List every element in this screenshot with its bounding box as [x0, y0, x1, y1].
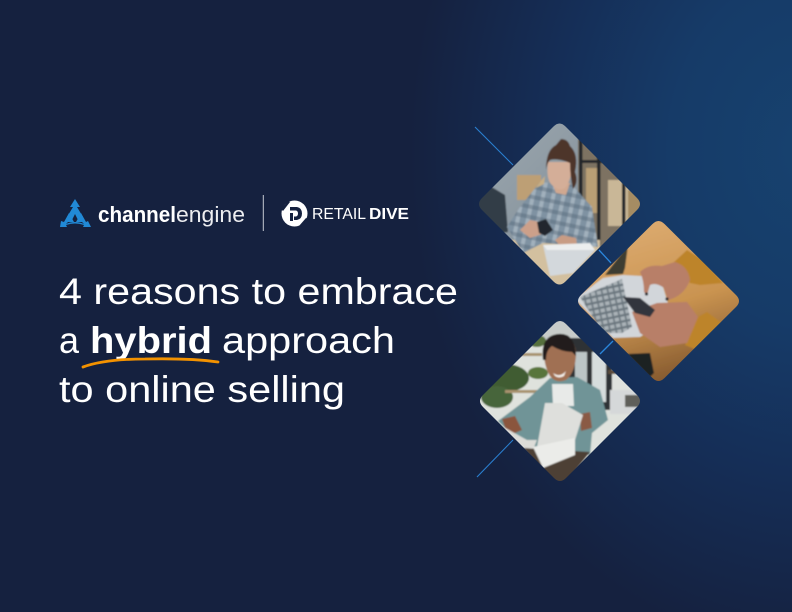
accent line: between middle and bottom photos — [600, 341, 613, 354]
wordmark: engine light: engine — [176, 202, 245, 227]
wordmark: RETAIL: RETAIL — [312, 206, 366, 223]
title line 2: approach: approach — [222, 320, 395, 361]
logo: ChannelEngine — [60, 199, 245, 227]
title line 2: a: a — [59, 320, 79, 361]
photo: woman scanning a parcel — [479, 124, 640, 284]
logo: Retail Dive — [281, 200, 409, 227]
photo: man unboxing a package — [480, 321, 640, 481]
wordmark: DIVE: DIVE — [369, 206, 409, 223]
icon: Retail Dive circle — [281, 200, 308, 227]
accent line: between top and middle photos — [599, 250, 611, 263]
title line 2: hybrid emphasis: hybrid — [90, 320, 212, 361]
title line 1: 4 reasons to embrace — [59, 271, 458, 312]
accent line: bottom photo — [477, 440, 513, 477]
wordmark: channelengine: channel — [98, 202, 176, 227]
accent line: top photo — [475, 127, 513, 165]
photo: hands with card at laptop — [578, 221, 739, 381]
title — [59, 271, 458, 410]
icon: ChannelEngine triangle arrows — [60, 199, 91, 227]
logo divider — [262, 195, 264, 231]
orange underline — [83, 359, 218, 367]
title line 3: to online selling — [59, 369, 345, 410]
